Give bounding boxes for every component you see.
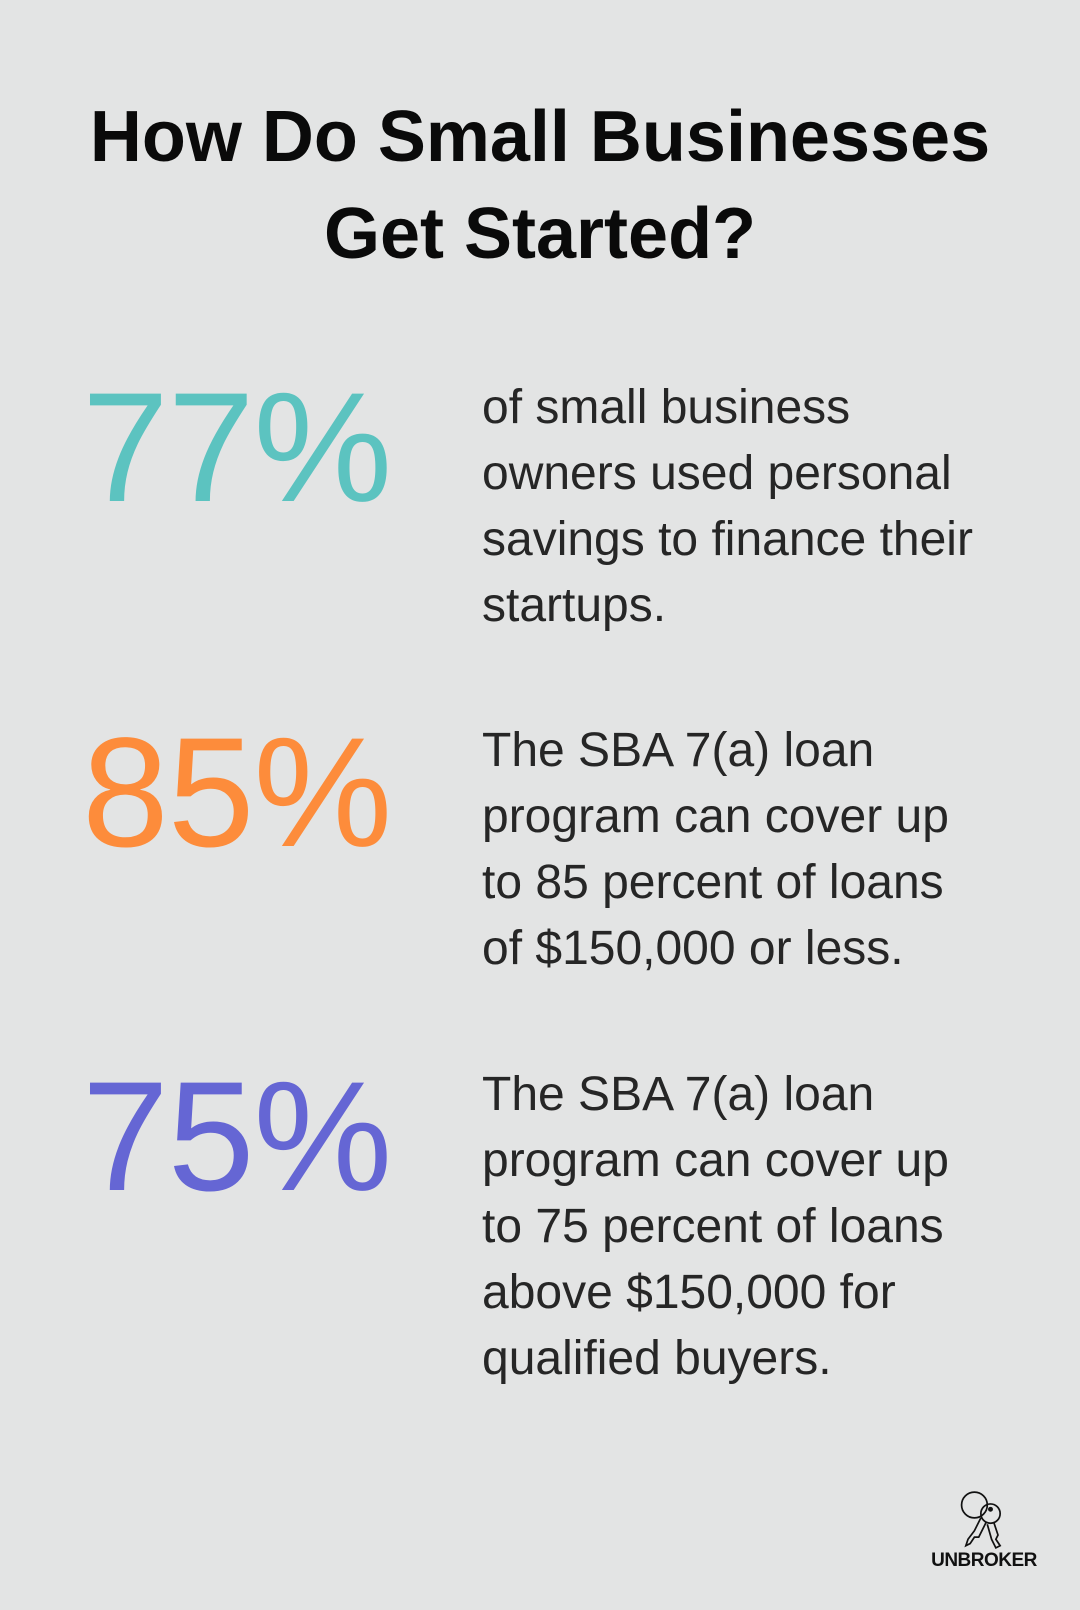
stat 1 text [482,381,973,632]
stat 2 text: of $150,000 or less. [482,922,904,975]
stat 2 number: 85% [82,706,391,880]
stat 1 text: of small business [482,381,850,434]
stat 2 text: program can cover up [482,790,949,843]
title: Get Started? [324,194,756,274]
title [90,97,990,274]
stat 1 text: startups. [482,579,666,632]
title: How Do Small Businesses [90,97,990,177]
stat 3 text [482,1068,949,1385]
stat 2 text: The SBA 7(a) loan [482,724,874,777]
stat 3 text: program can cover up [482,1134,949,1187]
stat 1 text: savings to finance their [482,513,973,566]
stat 3 text: qualified buyers. [482,1332,832,1385]
stat 3 number: 75% [82,1050,391,1224]
stat 1 text: owners used personal [482,447,952,500]
stat 1 number: 77% [82,361,391,535]
logo [931,1491,1037,1571]
stat 3 text: The SBA 7(a) loan [482,1068,874,1121]
icon: keys [960,1491,1002,1549]
stat 3 text: to 75 percent of loans [482,1200,944,1253]
logo text: UNBROKER [931,1550,1037,1571]
stat 2 text: to 85 percent of loans [482,856,944,909]
stat 3 text: above $150,000 for [482,1266,896,1319]
stat 2 text [482,724,949,975]
